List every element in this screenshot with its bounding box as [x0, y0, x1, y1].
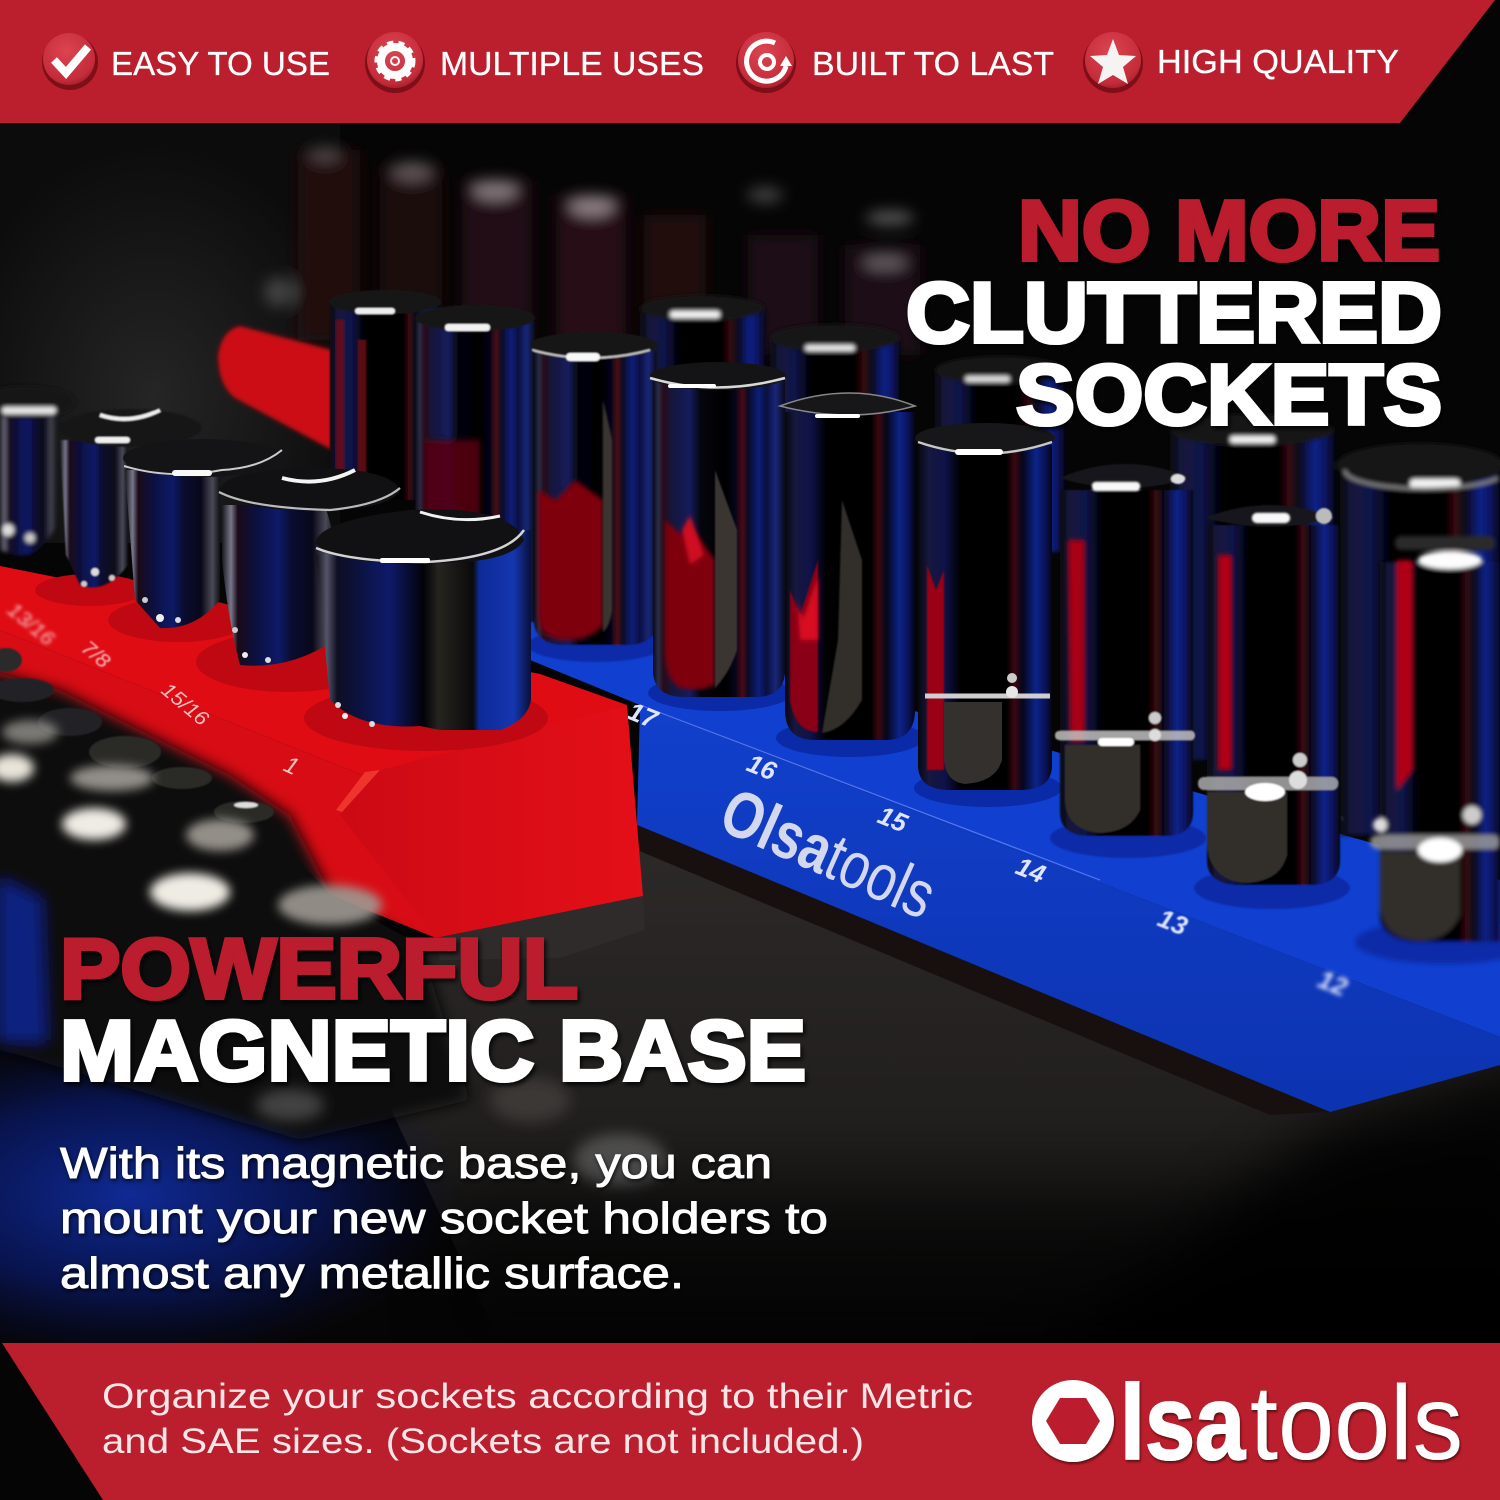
rail size numbers: 13 [1154, 903, 1192, 942]
heading: no more cluttered sockets: CLUTTERED [906, 266, 1442, 361]
socket [648, 362, 792, 711]
socket caps with highlights [0, 648, 274, 823]
chrome socket [0, 386, 75, 556]
heading: no more cluttered sockets: SOCKETS [1016, 348, 1442, 443]
feature: multiple uses: MULTIPLE USES [440, 46, 704, 83]
dark corner lower right [1000, 1050, 1500, 1400]
far blurred socket row [264, 147, 920, 355]
feature: high quality [1083, 32, 1399, 93]
icon: cycle gear button [736, 32, 796, 93]
chrome socket [123, 439, 283, 628]
text block: sizes note: and SAE sizes. (Sockets are not included.) [102, 1422, 864, 1461]
text block: sizes note [102, 1377, 973, 1461]
rail base strip [436, 896, 645, 960]
icon: star button [1083, 32, 1143, 93]
rail top surface [530, 600, 1500, 1037]
rail logo: Olsatools [710, 774, 947, 933]
socket [776, 393, 924, 757]
rail magnetic base strip [637, 825, 1330, 1115]
bottom banner [2, 1343, 1500, 1500]
text block: magnetic base description: mount your new socket holders to [60, 1194, 828, 1243]
rail size numbers: 5 [1338, 798, 1363, 831]
text block: magnetic base description: With its magnetic base, you can [60, 1139, 772, 1188]
text block: magnetic base description [60, 1139, 828, 1298]
socket [1050, 464, 1206, 858]
rail size numbers: 13/16 [3, 599, 59, 651]
blurred foreground sockets and blue rail [0, 648, 1500, 1365]
white highlight blobs [0, 720, 382, 925]
rail size numbers: 15 [874, 800, 912, 839]
brand logo: tools [1250, 1364, 1463, 1482]
socket [329, 290, 441, 500]
rail size numbers: 1 [279, 751, 303, 781]
rail front face [340, 705, 643, 938]
feature: built to last [736, 32, 1054, 93]
blue socket rail [530, 600, 1500, 1115]
front chrome socket row [329, 290, 1500, 964]
chrome socket [58, 409, 202, 588]
rail top surface [0, 565, 627, 776]
feature: easy to use: EASY TO USE [111, 46, 330, 83]
brand logo: O [1032, 1364, 1114, 1482]
top banner [0, 0, 1495, 123]
dark fade behind text [450, 1200, 1500, 1345]
chrome socket [315, 509, 531, 730]
heading: powerful magnetic base: POWERFUL [60, 922, 578, 1017]
rail size numbers: 12 [1314, 964, 1352, 1003]
rail size numbers: 17 [624, 696, 663, 735]
feature: easy to use [42, 33, 330, 90]
heading: no more cluttered sockets: NO MORE [1018, 184, 1440, 279]
feature: multiple uses [365, 32, 704, 93]
feature: built to last: BUILT TO LAST [812, 46, 1054, 83]
rail size numbers: 15/16 [157, 679, 213, 731]
text block: magnetic base description: almost any metallic surface. [60, 1249, 684, 1298]
brand logo [1032, 1364, 1463, 1482]
banner background [0, 0, 1495, 123]
red socket rail [0, 386, 645, 960]
icon: gear button [365, 32, 425, 93]
rail hole [304, 685, 548, 751]
rail size numbers: 16 [743, 748, 781, 787]
heading: powerful magnetic base: MAGNETIC BASE [60, 1004, 806, 1099]
back red socket rail [218, 326, 332, 450]
socket [1355, 536, 1500, 964]
icon: check mark button [42, 33, 98, 90]
socket [415, 305, 535, 622]
soft bokeh lights [256, 1078, 666, 1186]
foam mat lower centre [340, 840, 1500, 1343]
socket [528, 332, 664, 662]
rail left corner highlight [336, 770, 380, 812]
rail side towards front sockets [0, 628, 436, 938]
heading: no more cluttered sockets [906, 184, 1442, 443]
rail front face [637, 705, 1500, 1112]
rail size numbers: 14 [1012, 851, 1050, 890]
back chrome socket row [640, 295, 1500, 835]
rail size numbers: 7/8 [77, 637, 114, 673]
rail front edge highlight [640, 705, 1100, 880]
feature: high quality: HIGH QUALITY [1157, 44, 1399, 81]
rail size numbers [624, 696, 1363, 1003]
chrome socket [219, 468, 400, 666]
socket [1194, 505, 1350, 909]
socket [914, 423, 1062, 807]
foam mat upper left [0, 123, 340, 543]
rail size numbers [3, 599, 303, 781]
brand logo: lsa [1120, 1364, 1246, 1482]
heading: powerful magnetic base [60, 922, 806, 1099]
dark out-of-focus socket mass [0, 665, 470, 1140]
banner background [2, 1343, 1500, 1500]
text block: sizes note: Organize your sockets according to their Metric [102, 1377, 973, 1416]
